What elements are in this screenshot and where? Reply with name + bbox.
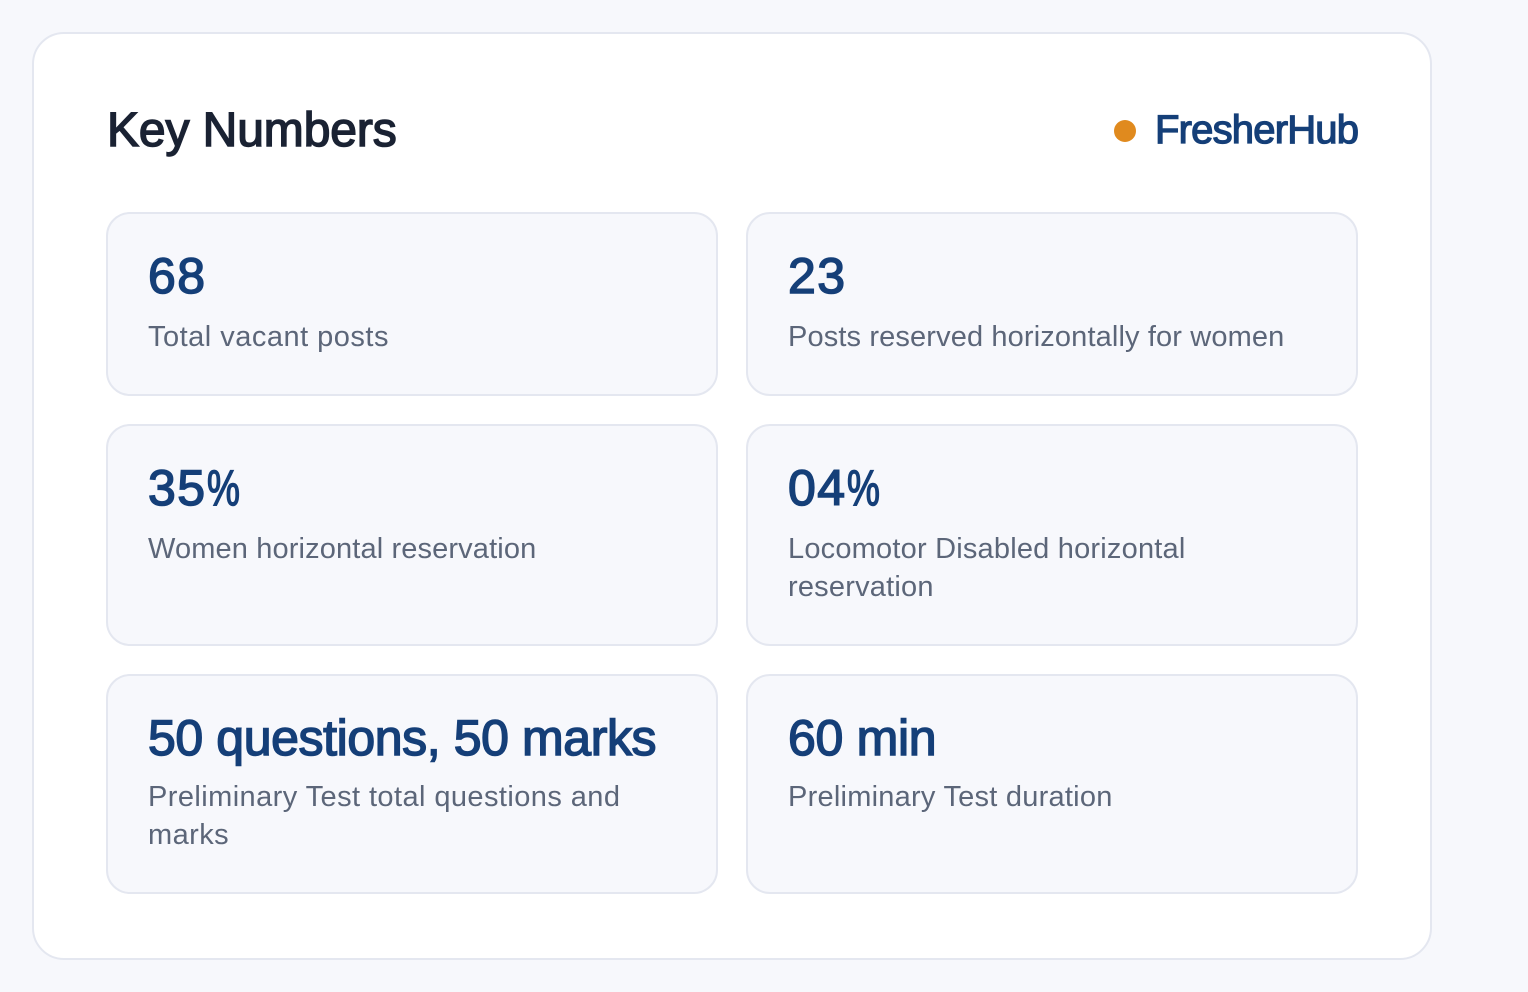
number: 04% [788, 460, 881, 516]
label: Women horizontal reservation [148, 533, 536, 565]
number: 04%: 04 [788, 460, 847, 516]
number: 35% [148, 460, 241, 516]
label: Preliminary Test duration [788, 781, 1113, 813]
brand logo [1114, 108, 1358, 152]
brand name: FresherHub [1155, 108, 1358, 152]
label: Posts reserved horizontally for women [788, 321, 1284, 353]
panel: preliminary test duration [746, 674, 1358, 894]
panel: women reservation [106, 424, 718, 646]
label: reservation [788, 571, 934, 603]
label [788, 533, 1186, 603]
panel: total vacant posts [106, 212, 718, 396]
number: 23: 23 [788, 248, 847, 304]
title: Key Numbers [107, 104, 397, 157]
panel: posts reserved for women [746, 212, 1358, 396]
label: Locomotor Disabled horizontal [788, 533, 1186, 565]
number: 35%: % [207, 460, 241, 516]
panel: locomotor disabled reservation [746, 424, 1358, 646]
number: 68: 68 [148, 248, 207, 304]
number: 60 min: 60 min [788, 710, 936, 766]
number: 35%: 35 [148, 460, 207, 516]
label [148, 781, 620, 851]
panel: preliminary test questions [106, 674, 718, 894]
number: 04%: % [847, 460, 881, 516]
label: marks [148, 819, 229, 851]
icon: orange dot [1114, 120, 1136, 142]
label: Preliminary Test total questions and [148, 781, 620, 813]
number: 50 questions, 50 marks: 50 questions, 50 marks [148, 710, 656, 766]
label: Total vacant posts [148, 321, 389, 353]
